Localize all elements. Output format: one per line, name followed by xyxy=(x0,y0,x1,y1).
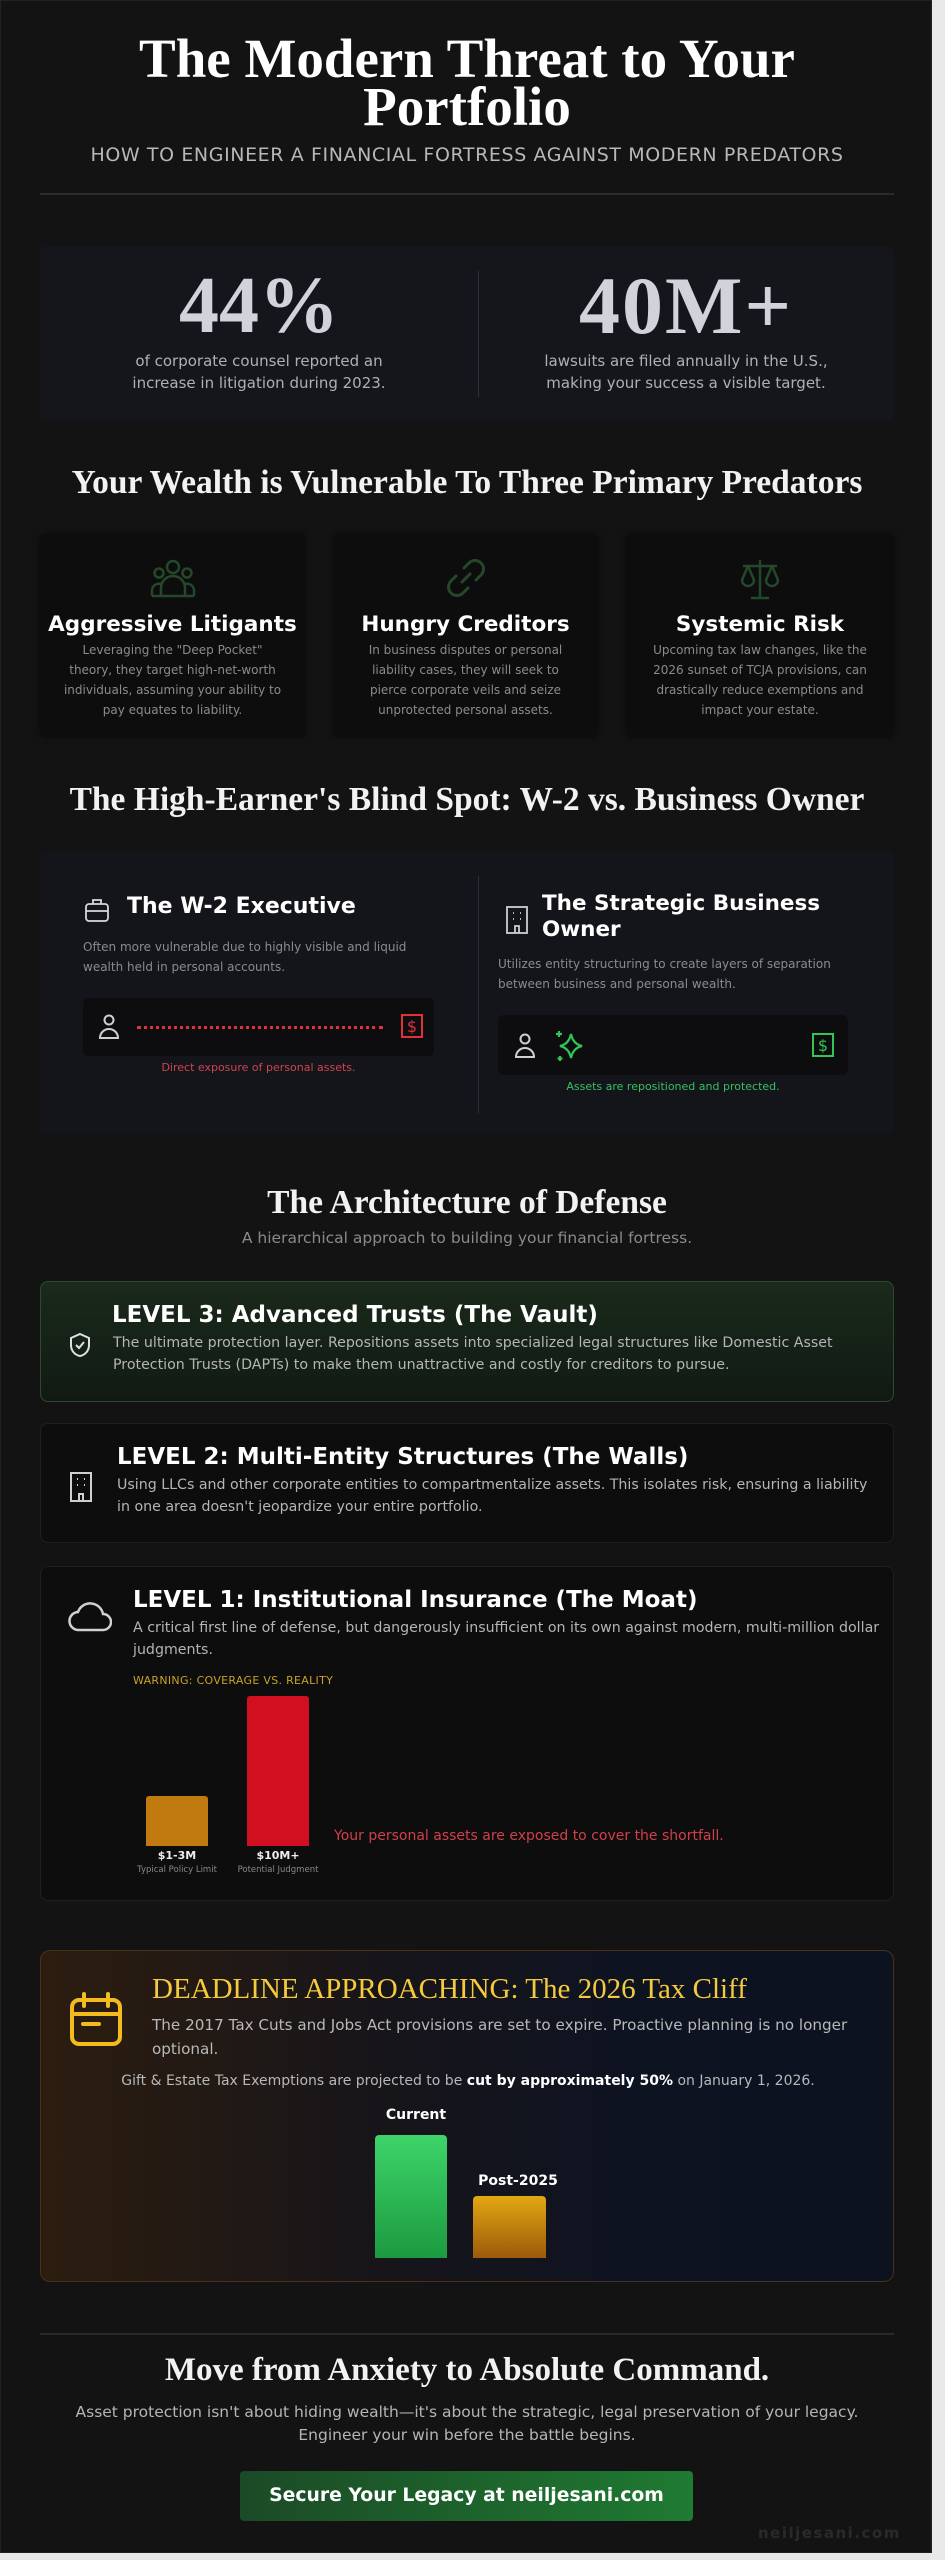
heading: predators: Your Wealth is Vulnerable To Three Primary Predators xyxy=(72,464,862,501)
panel: level 2: LEVEL 2: Multi-Entity Structures (The Walls) xyxy=(117,1444,688,1470)
subtitle: HOW TO ENGINEER A FINANCIAL FORTRESS AGAINST MODERN PREDATORS xyxy=(90,144,844,166)
stat: 44%: of corporate counsel reported an xyxy=(135,352,383,370)
stat: 40M+: lawsuits are filed annually in the U.S., xyxy=(544,352,828,370)
icon: building xyxy=(506,906,528,934)
text: closing: Asset protection isn't about hiding wealth—it's about the strategic, legal preservation of your legacy. xyxy=(76,2403,858,2421)
panel: level 1: LEVEL 1: Institutional Insurance (The Moat) xyxy=(133,1587,697,1613)
diagram: exposure: $ xyxy=(407,1017,417,1036)
card: litigants: Leveraging the "Deep Pocket" theory, they target high-net-worth individuals, assuming your ability to pay equates to liability. xyxy=(64,643,281,717)
label: warning: WARNING: COVERAGE VS. REALITY xyxy=(133,1674,333,1687)
title xyxy=(139,28,795,137)
column: W-2 executive: The W-2 Executive xyxy=(127,894,356,919)
stat: 44%: 44% xyxy=(179,262,339,350)
icon: link xyxy=(447,559,485,597)
panel: deadline: The 2017 Tax Cuts and Jobs Act provisions are set to expire. Proactive planning is no longer optional. xyxy=(152,2016,847,2058)
column: business owner: The Strategic Business xyxy=(542,891,820,916)
text: exemption note: Gift & Estate Tax Exemptions are projected to be cut by approximately 50% on January 1, 2026. xyxy=(121,2073,815,2089)
column: W-2 executive xyxy=(83,894,434,1074)
callout: shortfall: Your personal assets are exposed to cover the shortfall. xyxy=(334,1828,724,1844)
bar chart: exemptions xyxy=(375,2107,558,2258)
panel: level 1: A critical first line of defense, but dangerously insufficient on its own against modern, multi-million dollar judgments. xyxy=(133,1620,879,1658)
card: systemic risk xyxy=(626,534,894,737)
column: business owner xyxy=(498,891,848,1093)
heading: call to action: Move from Anxiety to Absolute Command. xyxy=(165,2352,769,2388)
panel: level 2: Using LLCs and other corporate entities to compartmentalize assets. This isolates risk, ensuring a liability in one area doesn't jeopardize your entire portfolio. xyxy=(117,1477,867,1515)
column: business owner: Assets are repositioned and protected. xyxy=(566,1080,780,1093)
bar chart: exemptions: Current xyxy=(386,2107,446,2123)
icon: cloud xyxy=(68,1602,112,1632)
icon: shield xyxy=(70,1332,90,1357)
title: Portfolio xyxy=(363,76,571,137)
panel: level 1 xyxy=(40,1566,894,1901)
icon: building xyxy=(70,1472,92,1502)
subtitle: architecture: A hierarchical approach to building your financial fortress. xyxy=(242,1229,692,1247)
title: The Modern Threat to Your xyxy=(139,28,795,89)
diagram: protected: $ xyxy=(818,1036,828,1055)
heading: blind spot: The High-Earner's Blind Spot: W-2 vs. Business Owner xyxy=(70,781,864,818)
column: W-2 executive: Direct exposure of personal assets. xyxy=(161,1061,356,1074)
stat: 40M+: 40M+ xyxy=(579,260,793,351)
stat: 40M+ xyxy=(544,260,828,392)
icon: briefcase xyxy=(85,899,109,922)
card: litigants: Aggressive Litigants xyxy=(48,612,297,637)
text: closing: Engineer your win before the battle begins. xyxy=(298,2426,636,2444)
bar chart: coverage vs reality: Typical Policy Limit xyxy=(137,1865,217,1875)
panel: level 2 xyxy=(40,1423,894,1543)
stat: 44%: increase in litigation during 2023. xyxy=(132,374,386,392)
bar chart: exemptions: Post-2025 xyxy=(478,2173,558,2189)
watermark: neiljesani.com xyxy=(758,2524,901,2542)
diagram: exposure xyxy=(83,998,434,1056)
heading: architecture: The Architecture of Defense xyxy=(267,1184,667,1221)
bar chart: coverage vs reality: $1-3M xyxy=(158,1849,196,1862)
panel: comparison xyxy=(40,851,894,1134)
bar chart: coverage vs reality: Potential Judgment xyxy=(238,1865,318,1875)
panel: stats xyxy=(40,246,894,421)
title: deadline: DEADLINE APPROACHING: The 2026 Tax Cliff xyxy=(152,1973,747,2005)
icon: calendar xyxy=(70,1992,122,2046)
button: CTA xyxy=(240,2471,693,2521)
diagram: protected xyxy=(498,1015,848,1075)
panel: deadline xyxy=(40,1950,894,2282)
card: litigants xyxy=(40,534,305,737)
panel: level 3: The ultimate protection layer. Repositions assets into specialized legal structures like Domestic Asset Protection Trusts (DAPTs) to make them unattractive and costly for creditors to pursue. xyxy=(113,1335,833,1373)
column: business owner: Utilizes entity structuring to create layers of separation between business and personal wealth. xyxy=(498,957,831,991)
card: creditors xyxy=(333,534,598,737)
card: systemic risk: Systemic Risk xyxy=(676,612,844,637)
text: closing xyxy=(76,2403,858,2444)
button: CTA: Secure Your Legacy at neiljesani.com xyxy=(269,2485,664,2506)
card: creditors: In business disputes or personal liability cases, they will seek to pierce corporate veils and seize unprotected personal assets. xyxy=(369,643,562,717)
icon: users xyxy=(150,560,196,598)
panel: level 3 xyxy=(40,1281,894,1402)
stat: 44% xyxy=(132,262,386,392)
bar chart: coverage vs reality: $10M+ xyxy=(256,1849,300,1862)
column: business owner: Owner xyxy=(542,917,621,942)
icon: scale xyxy=(740,560,780,600)
column: W-2 executive: Often more vulnerable due to highly visible and liquid wealth held in personal accounts. xyxy=(83,940,406,974)
card: creditors: Hungry Creditors xyxy=(361,612,570,637)
bar chart: coverage vs reality xyxy=(137,1696,318,1875)
stat: 40M+: making your success a visible target. xyxy=(546,374,826,392)
panel: level 3: LEVEL 3: Advanced Trusts (The Vault) xyxy=(112,1302,598,1328)
card: systemic risk: Upcoming tax law changes, like the 2026 sunset of TCJA provisions, can drastically reduce exemptions and impact your estate. xyxy=(653,643,867,717)
